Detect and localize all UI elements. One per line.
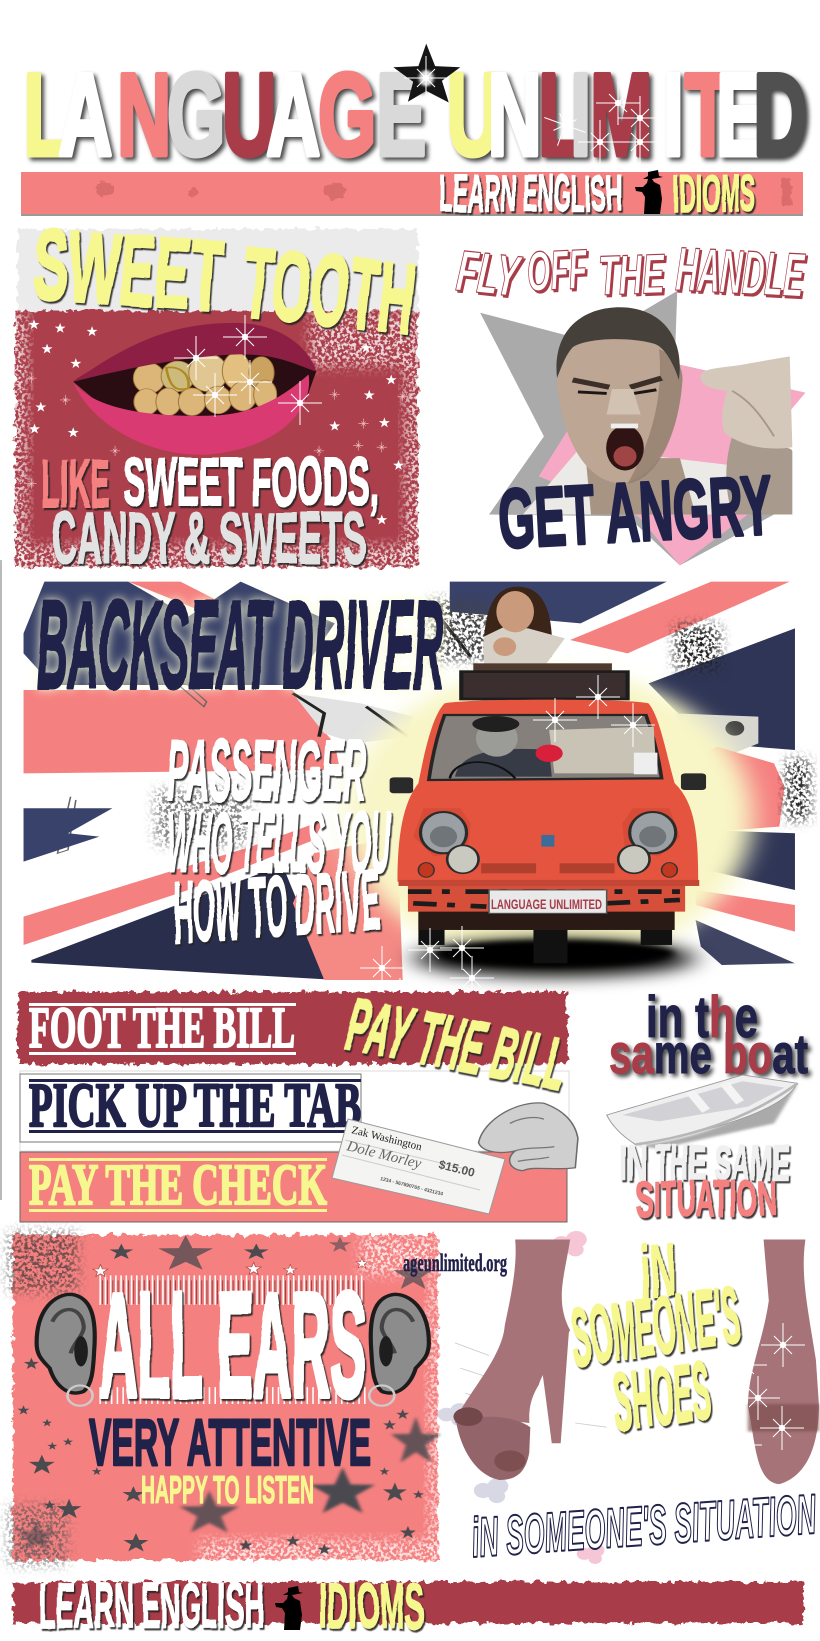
icon: mouth with teeth [73,323,316,455]
illustration: cheque: $15.00 [437,1157,477,1180]
idiom: foot the bill [29,995,296,1060]
title: Language Unlimited: LANGUAGE UNLIMITED [24,49,807,180]
idiom: pick up the tab [29,1072,361,1140]
idiom: in the same boat: same boat [609,1022,808,1085]
infographic canvas: ALL EARS [99,1263,366,1428]
illustration: woman passenger [484,587,565,663]
idiom: fly off the handle: FLY [454,238,525,310]
panel: sweet tooth [8,208,424,579]
idiom: in the same boat [609,985,808,1085]
meaning: very attentive: VERY ATTENTIVE [89,1405,371,1479]
illustration: right high-heel shoe [748,1239,819,1484]
sparkles on car [360,675,655,1022]
footer bar [13,1570,803,1641]
idiom: in someone's shoes [565,1228,746,1449]
idiom: fly off the handle: THE [597,242,666,307]
website address: ageunlimited.org [403,1250,507,1277]
icon: man silhouette [635,170,663,214]
icon: right ear [369,1294,429,1406]
panel: backseat driver [24,576,810,1022]
idiom: in the same boat: in the [646,985,758,1050]
illustration: left high-heel shoe [453,1239,570,1480]
decoration: bursting spikes [93,1258,369,1396]
meaning: like sweet foods, candy and sweets [42,444,379,579]
footer bar: LEARN ENGLISH [39,1572,264,1641]
illustration: cheque: Dole Morley [344,1138,423,1172]
panel: fly off the handle [454,235,807,566]
illustration: cheque: 1234 - 567890765 - 4321234 [380,1176,444,1198]
illustration: hand holding cheque [479,1103,578,1171]
sparkles on teeth [174,315,322,425]
idiom: in someone's shoes: iN [636,1228,680,1314]
illustration: union flag background [24,582,795,980]
idiom: pick up the tab: PICK UP THE TAB [29,1072,361,1140]
heading: sweet tooth: SWEET [29,208,227,333]
idiom: pay the check: PAY THE CHECK [29,1152,327,1217]
idiom: pay the check [29,1152,327,1217]
panel: all ears [8,1232,442,1565]
sparkles on right shoe [718,1323,805,1467]
icon: man silhouette [275,1586,303,1630]
idiom: fly off the handle: OFF [525,237,589,303]
sparkles on title [404,56,662,164]
icon: black star with sparkle [393,44,460,103]
meaning: like sweet foods, candy and sweets: LIKE [42,446,110,522]
footer bar: IDIOMS [319,1570,424,1641]
header bar [21,165,803,223]
icon: left ear [37,1294,95,1406]
illustration: red car [390,663,706,977]
panel: all ears: HAPPY TO LISTEN [141,1469,314,1512]
meaning: in the same situation [620,1135,790,1227]
idiom: foot the bill: FOOT THE BILL [29,995,295,1060]
panel: backseat driver: PASSENGER [167,723,366,819]
panel: sweet tooth: SWEET FOODS, [123,444,379,520]
illustration: cheque: Zak Washington [350,1124,423,1153]
illustration: star, angry man and pointing hand [480,291,805,565]
illustration: cheque [332,1119,505,1214]
meaning: passenger who tells you how to drive [167,723,391,962]
panel: in the same boat [607,985,808,1227]
illustration: rowing boat [607,1075,798,1149]
number plate: LANGUAGE UNLIMITED [491,896,602,912]
panel: backseat driver: HOW TO DRIVE [170,852,384,962]
heading: sweet tooth: TOOTH [238,226,420,356]
panel: in someone's shoes [438,1228,819,1569]
panel: foot the bill, pick up the tab, pay the check [18,982,578,1222]
meaning: like sweet foods, candy and sweets: CANDY & SWEETS [52,499,366,579]
idiom: fly off the handle [454,235,807,311]
